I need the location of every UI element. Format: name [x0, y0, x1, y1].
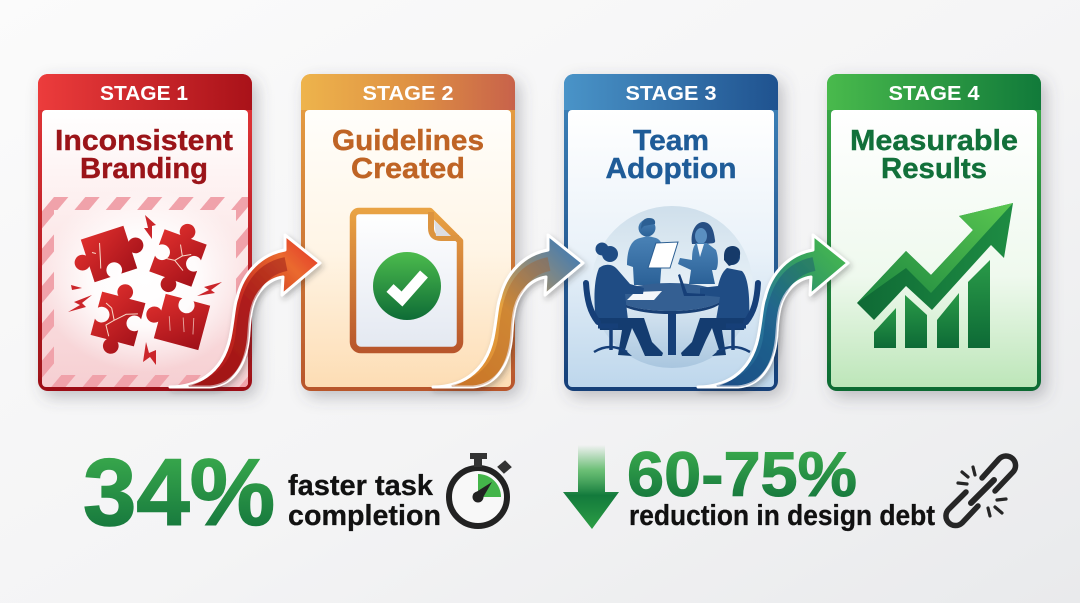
arrow dark underside [857, 203, 1013, 320]
card body [831, 110, 1037, 387]
card body [568, 110, 774, 387]
middle bar [971, 480, 994, 503]
card frame [301, 74, 515, 391]
heading: Team [633, 125, 709, 157]
standing man [627, 218, 663, 285]
puzzle piece top right [145, 217, 211, 299]
left chair [586, 283, 627, 352]
header band [38, 74, 252, 110]
seated man [681, 246, 749, 356]
laptop [678, 274, 705, 296]
arrow: stage 2 to stage 3 [433, 235, 583, 392]
check mark [390, 274, 424, 299]
fold shade [434, 220, 451, 236]
stat caption: faster task [288, 470, 433, 502]
lightning bolts [68, 215, 222, 365]
icon: rising growth chart [857, 203, 1013, 348]
green check circle [373, 252, 441, 320]
watch ring [449, 468, 507, 526]
heading: Guidelines [332, 125, 484, 157]
crown [470, 453, 487, 467]
standing woman [678, 222, 718, 284]
lower link [946, 492, 978, 526]
heading: Adoption [606, 153, 736, 185]
seated woman [594, 242, 663, 356]
arrow: stage 3 to stage 4 [698, 235, 848, 392]
puzzle piece bottom right [141, 290, 210, 350]
document held [648, 242, 678, 268]
card frame [564, 74, 778, 391]
icon: document with check [353, 211, 460, 350]
paper on table [627, 291, 662, 300]
card frame [827, 74, 1041, 391]
card body [305, 110, 511, 387]
big number: 60-75% [627, 440, 857, 510]
panel: stage 1 inconsistent branding [38, 74, 252, 391]
table leg [668, 305, 676, 355]
arrow light face [857, 203, 1013, 303]
panel: stage 2 guidelines created [301, 74, 515, 391]
bars [874, 260, 990, 348]
stage label: STAGE 2 [362, 83, 454, 105]
page fold [431, 212, 459, 238]
heading: Results [881, 153, 987, 185]
header band [564, 74, 778, 110]
side button [499, 462, 510, 472]
header band [301, 74, 515, 110]
heading: Branding [80, 153, 208, 185]
table top [617, 283, 723, 311]
backdrop circle [591, 206, 753, 368]
stat: 60-75% reduction in design debt [563, 440, 1016, 532]
stat: 34% faster task completion [83, 440, 510, 546]
stat caption: completion [288, 500, 441, 532]
right chair [717, 283, 758, 352]
panel: stage 4 measurable results [827, 74, 1041, 391]
stat caption: reduction in design debt [629, 500, 935, 532]
heading: Inconsistent [55, 125, 234, 157]
icon: stopwatch [449, 453, 510, 526]
puzzle piece top left [68, 222, 150, 286]
stage label: STAGE 3 [626, 83, 716, 105]
green time wedge [478, 474, 501, 497]
inner glow [40, 188, 250, 372]
header band [827, 74, 1041, 110]
heading: Created [351, 153, 465, 185]
sparks [958, 467, 1006, 516]
stage label: STAGE 1 [100, 83, 188, 105]
arrow: stage 1 to stage 2 [170, 235, 320, 392]
icon: broken chain link [946, 456, 1016, 526]
hazard stripe border [42, 197, 248, 388]
stage label: STAGE 4 [888, 83, 980, 105]
big number: 34% [83, 440, 275, 546]
card frame [38, 74, 252, 391]
clock hand [473, 482, 492, 501]
heading: Measurable [850, 125, 1018, 157]
illustration: team meeting [586, 206, 758, 368]
icon: broken puzzle pieces [68, 215, 222, 365]
document sheet [353, 211, 460, 350]
panel: stage 3 team adoption [564, 74, 778, 391]
hub [472, 492, 484, 502]
upper link [982, 456, 1016, 491]
icon: down arrow [563, 445, 619, 529]
table edge [617, 297, 723, 314]
card body [42, 110, 248, 387]
puzzle piece bottom left [87, 279, 149, 359]
